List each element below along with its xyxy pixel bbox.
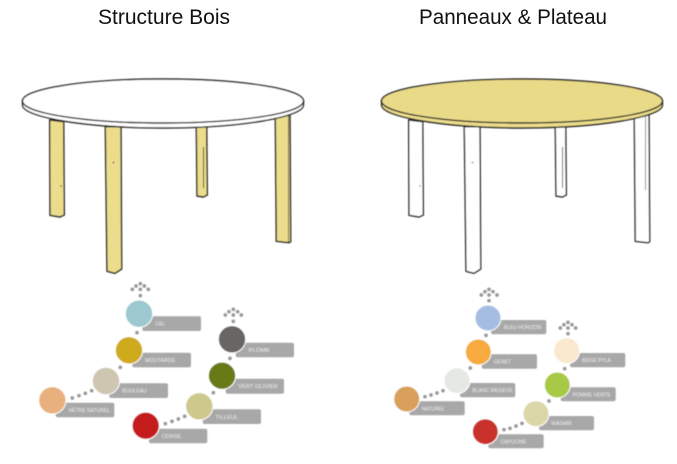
leg: front xyxy=(464,127,481,273)
leg: front xyxy=(105,127,122,273)
swatch: Ciel xyxy=(125,300,201,331)
swatch: Bleu horizon xyxy=(475,305,546,334)
table top: yellow xyxy=(382,79,662,128)
leg: right xyxy=(275,115,291,243)
leg: back left xyxy=(409,120,423,217)
swatch: Moutarde xyxy=(115,337,191,367)
swatch: Cerise: CERISE xyxy=(162,434,181,440)
swatch: Hêtre naturel xyxy=(39,387,114,417)
swatch: Naturel xyxy=(394,386,465,415)
swatch: Blanc Megève xyxy=(444,368,515,397)
title: Structure Bois: Structure Bois xyxy=(98,6,230,29)
swatch: Naturel: NATUREL xyxy=(422,406,445,412)
swatch: Bouleau xyxy=(92,367,168,398)
swatch: Vert olivier: VERT OLIVIER xyxy=(238,384,278,390)
swatch: Plomb xyxy=(218,326,294,357)
swatch: Wasabi: WASABI xyxy=(551,421,572,427)
swatch: Pomme verte xyxy=(544,372,616,401)
table top: white xyxy=(22,79,304,128)
swatch: Capucine xyxy=(472,419,544,448)
swatch: Beige Pyla xyxy=(554,338,625,367)
leg: back centre xyxy=(555,127,566,197)
swatch: Moutarde: MOUTARDE xyxy=(145,358,176,364)
swatch: Ciel: CIEL xyxy=(155,322,165,328)
swatch: Pomme verte: POMME VERTE xyxy=(573,392,611,398)
swatch: Vert olivier xyxy=(208,362,284,394)
swatch: Wasabi xyxy=(523,401,594,430)
illustration: table with panels and top highlighted xyxy=(382,79,662,273)
title: Panneaux & Plateau: Panneaux & Plateau xyxy=(419,6,607,29)
swatch: Beige Pyla: BEIGE PYLA xyxy=(582,358,611,364)
swatch: Bouleau: BOULEAU xyxy=(122,389,147,395)
leg: right xyxy=(634,115,650,243)
leg: back left xyxy=(50,120,64,217)
swatches: panel and top colours xyxy=(394,287,625,448)
swatch: Genet xyxy=(465,339,537,369)
illustration: table with wood structure highlighted xyxy=(22,79,304,273)
swatch: Bleu horizon: BLEU HORIZON xyxy=(504,325,541,331)
swatch: Tilleul xyxy=(186,393,261,424)
connector dots xyxy=(423,287,577,431)
connector dots xyxy=(70,282,243,425)
swatch: Tilleul: TILLEUL xyxy=(216,415,238,421)
swatch: Plomb: PLOMB xyxy=(249,348,270,354)
swatch: Capucine: CAPUCINE xyxy=(501,439,527,445)
swatch: Cerise xyxy=(132,412,207,443)
swatch: Hêtre naturel: HÊTRE NATUREL xyxy=(69,406,110,414)
swatches: wood structure colours xyxy=(39,282,294,443)
swatch: Genet: GENET xyxy=(494,359,512,365)
swatch: Blanc Megève: BLANC MEGEVE xyxy=(472,388,513,394)
leg: back centre xyxy=(196,127,207,197)
